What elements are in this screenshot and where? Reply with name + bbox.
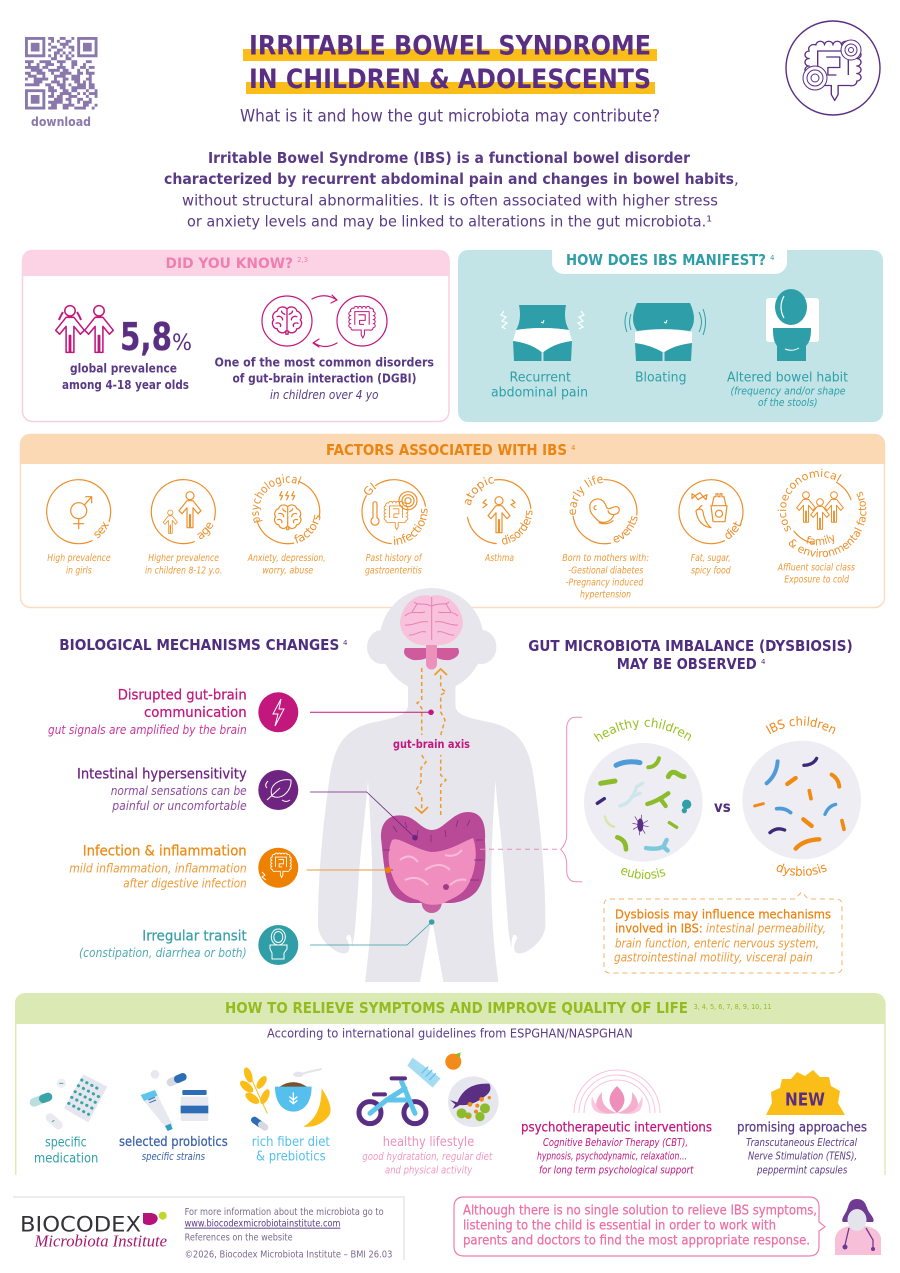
QR download label: download — [31, 115, 91, 129]
intro paragraph: or anxiety levels and may be linked to alterations in the gut microbiota.¹ — [187, 212, 712, 230]
statistic caption: global prevalence — [70, 360, 177, 376]
bracket to intestine — [480, 717, 582, 882]
mechanism: infection and inflammation: Infection & inflammation — [83, 844, 247, 860]
factor captions: Anxiety, depression, — [247, 553, 326, 564]
factor: atopic disorders — [464, 477, 532, 544]
probiotics label: selected probiotics — [119, 1135, 228, 1150]
speech bubble — [454, 1197, 825, 1256]
factor: diet: diet — [725, 521, 742, 539]
DGBI text — [214, 354, 434, 402]
manifest labels — [491, 370, 848, 409]
callout: dysbiosis mechanisms: brain function, enteric nervous system, — [615, 935, 819, 950]
dysbiosis circle — [742, 741, 861, 859]
heading: relieve: HOW TO RELIEVE SYMPTOMS AND IMPROVE QUALITY OF LIFE — [225, 999, 688, 1017]
intro paragraph — [164, 149, 739, 230]
factor captions: -Gestional diabetes — [568, 565, 643, 576]
logo: Biocodex Microbiota Institute: Microbiota Institute — [34, 1232, 167, 1251]
promising approaches label: promising approaches — [737, 1121, 867, 1136]
factor: atopic disorders: atopic — [464, 477, 494, 506]
mechanism: irregular transit: (constipation, diarrhea or both) — [79, 946, 247, 960]
references: 2,3 — [297, 256, 308, 264]
eubiosis labels: eubiosis — [621, 868, 666, 880]
factor: diet — [678, 479, 744, 544]
manifest labels: Altered bowel habit — [727, 370, 848, 386]
mechanism: intestinal hypersensitivity: normal sensations can be — [111, 784, 247, 798]
factor captions: in girls — [66, 565, 92, 576]
mechanism: irregular transit: Irregular transit — [142, 929, 247, 945]
subtitle: What is it and how the gut microbiota may contribute? — [240, 106, 660, 126]
promising approaches label: Transcutaneous Electrical — [746, 1137, 857, 1149]
callout: dysbiosis mechanisms: Dysbiosis may influence mechanisms — [615, 906, 831, 921]
intro paragraph: characterized by recurrent abdominal pain and changes in bowel habits — [164, 170, 734, 188]
factor: socioeconomical family and environmental — [778, 468, 866, 558]
promising approaches label: peppermint capsules — [756, 1164, 848, 1176]
factor: GI infections: infections — [394, 508, 428, 545]
factor: sex — [46, 479, 112, 544]
medication label: specific — [45, 1136, 87, 1151]
footer information: For more information about the microbiota go to — [185, 1207, 384, 1218]
factor: psychological factors: psychological — [252, 474, 302, 523]
guidelines note: According to international guidelines from ESPGHAN/NASPGHAN — [267, 1027, 633, 1041]
panel: how to relieve symptoms — [15, 993, 885, 1176]
factor captions: Past history of — [366, 553, 423, 564]
intro paragraph: without structural abnormalities. It is often associated with higher stress — [182, 192, 718, 210]
factor captions: gastroenteritis — [365, 565, 422, 576]
factor: GI infections: GI — [364, 482, 376, 495]
icon: toilet — [766, 289, 819, 361]
mechanism: intestinal hypersensitivity: painful or uncomfortable — [111, 799, 247, 813]
dysbiosis labels — [766, 716, 836, 876]
mechanism: intestinal hypersensitivity — [77, 766, 418, 840]
icon: bloating — [625, 303, 706, 361]
mechanism: intestinal hypersensitivity: Intestinal hypersensitivity — [77, 766, 247, 782]
psychotherapy label: psychotherapeutic interventions — [521, 1121, 712, 1136]
reference: 4 — [571, 444, 576, 452]
statistic caption — [62, 360, 189, 392]
factor captions: spicy food — [691, 565, 731, 576]
icon: healthy lifestyle — [359, 1052, 499, 1127]
manifest labels: of the stools) — [758, 397, 818, 409]
factor captions: hypertension — [580, 590, 631, 601]
statistic 5,8%: 5,8 — [120, 315, 172, 359]
callout: dysbiosis mechanisms: gastrointestinal motility, visceral pain — [614, 950, 813, 965]
psychotherapy label: for long term psychological support — [539, 1164, 694, 1176]
probiotics label — [119, 1135, 228, 1163]
factor: atopic disorders: disorders — [502, 510, 532, 544]
fiber label: & prebiotics — [256, 1150, 326, 1165]
panel: did you know — [22, 250, 449, 422]
factor: early life events: early life — [570, 475, 603, 515]
mechanism: disrupted gut-brain communication: Disrupted gut-brain — [118, 687, 247, 703]
DGBI text: One of the most common disorders — [214, 354, 434, 370]
dysbiosis labels: IBS children — [766, 716, 836, 734]
icon: fiber diet — [238, 1066, 331, 1127]
icon: abdominal pain — [501, 305, 584, 361]
factor captions — [47, 553, 855, 601]
QR code — [25, 37, 98, 110]
heading: did you know: DID YOU KNOW? — [166, 256, 293, 272]
factor: psychological factors — [252, 474, 320, 544]
icon: inflamed gut in circle — [786, 21, 880, 115]
callout: dysbiosis mechanisms: intestinal permeability, — [706, 921, 826, 936]
manifest labels: Bloating — [635, 370, 686, 386]
medication label: medication — [34, 1152, 98, 1167]
mechanism: infection and inflammation — [69, 844, 391, 891]
intro paragraph: Irritable Bowel Syndrome (IBS) is a functional bowel disorder — [208, 149, 691, 167]
eubiosis labels — [594, 718, 691, 880]
factor captions: worry, abuse — [262, 565, 313, 576]
icon: lotus — [574, 1070, 660, 1114]
body silhouette — [318, 588, 545, 982]
factor: GI infections — [361, 479, 428, 545]
fiber label: rich fiber diet — [252, 1135, 330, 1150]
logo: Biocodex Microbiota Institute — [20, 1212, 167, 1251]
lifestyle label: healthy lifestyle — [383, 1135, 474, 1150]
statistic 5,8%: % — [172, 331, 192, 356]
factor captions: Higher prevalence — [148, 553, 219, 564]
speech bubble: Although there is no single solution to relieve IBS symptoms, — [463, 1203, 817, 1218]
factor captions: Affluent social class — [777, 563, 855, 574]
callout: dysbiosis mechanisms: involved in IBS: — [615, 921, 703, 936]
mechanism: irregular transit — [79, 919, 435, 965]
footer information: ©2026, Biocodex Microbiota Institute – BMI 26.03 — [185, 1250, 392, 1261]
mechanism: disrupted gut-brain communication: gut signals are amplified by the brain — [48, 723, 247, 737]
mechanism: disrupted gut-brain communication — [48, 687, 434, 737]
logo: Biocodex Microbiota Institute: BIOCODEX — [20, 1213, 141, 1237]
heading: biological mechanisms: 4 — [343, 639, 348, 647]
intestine illustration — [381, 812, 485, 913]
lifestyle label: and physical activity — [385, 1164, 473, 1176]
icon: two children — [56, 306, 113, 352]
factor captions: Exposure to cold — [784, 575, 850, 586]
title: IRRITABLE BOWEL SYNDROME — [249, 30, 651, 62]
probiotics label: specific strains — [142, 1151, 205, 1163]
factor captions: High prevalence — [47, 553, 111, 564]
mechanism: infection and inflammation: mild inflammation, inflammation — [69, 861, 247, 875]
icon: doctor — [835, 1199, 881, 1255]
factor captions: Born to mothers with: — [562, 553, 649, 564]
psychotherapy label: Cognitive Behavior Therapy (CBT), — [543, 1137, 688, 1149]
factor: age: age — [197, 522, 214, 540]
mechanism: infection and inflammation: after digestive infection — [123, 877, 247, 891]
lifestyle label — [362, 1135, 493, 1176]
footer frame — [13, 1197, 404, 1260]
heading: dysbiosis — [528, 637, 853, 673]
factor captions: in children 8-12 y.o. — [145, 565, 222, 576]
footer information: References on the website — [185, 1233, 293, 1244]
heading: dysbiosis: MAY BE OBSERVED — [617, 655, 757, 673]
heading: biological mechanisms: BIOLOGICAL MECHANISMS CHANGES — [59, 636, 339, 654]
title: IN CHILDREN & ADOLESCENTS — [249, 64, 651, 95]
footer information: www.biocodexmicrobiotainstitute.com — [185, 1219, 340, 1230]
reference: 4 — [770, 254, 775, 262]
factor: age — [150, 479, 216, 544]
factor: psychological factors: factors — [294, 514, 320, 544]
DGBI text: in children over 4 yo — [270, 388, 378, 402]
icon: new badge: NEW — [785, 1090, 825, 1111]
icon: probiotics — [141, 1070, 208, 1131]
icon: new badge — [766, 1070, 845, 1115]
callout: dysbiosis mechanisms — [604, 892, 842, 973]
speech bubble: parents and doctors to find the most appropriate response. — [463, 1233, 810, 1248]
promising approaches label: Nerve Stimulation (TENS), — [748, 1150, 857, 1162]
mechanism: disrupted gut-brain communication: communication — [144, 705, 247, 721]
factor: socioeconomical family and environmental: socioeconomical — [778, 468, 842, 532]
promising approaches label — [737, 1121, 867, 1176]
factor captions: -Pregnancy induced — [566, 578, 644, 589]
DGBI text: of gut-brain interaction (DGBI) — [232, 370, 416, 386]
heading: manifest: HOW DOES IBS MANIFEST? — [566, 251, 766, 269]
icon: medication — [34, 1074, 107, 1125]
heading: factors: FACTORS ASSOCIATED WITH IBS — [326, 441, 567, 459]
lifestyle label: good hydratation, regular diet — [362, 1151, 493, 1163]
psychotherapy label — [521, 1121, 712, 1176]
factor: early life events: events — [614, 516, 638, 542]
manifest labels: Recurrent — [510, 370, 571, 386]
brain illustration — [400, 595, 463, 670]
medication label — [34, 1136, 98, 1167]
references: 3, 4, 5, 6, 7, 8, 9, 10, 11 — [694, 1003, 772, 1011]
factor captions: Fat, sugar, — [691, 553, 731, 564]
factor: sex: sex — [94, 522, 110, 538]
intro paragraph: , — [734, 170, 739, 188]
heading: dysbiosis: 4 — [761, 658, 766, 666]
gut-brain axis label: gut-brain axis — [393, 737, 470, 751]
statistic caption: among 4-18 year olds — [62, 377, 189, 392]
factor captions: Asthma — [484, 553, 514, 564]
footer information — [185, 1207, 392, 1261]
manifest labels: abdominal pain — [491, 384, 588, 400]
factor: early life events — [570, 475, 638, 544]
manifest labels: (frequency and/or shape — [730, 386, 846, 398]
panel: how does IBS manifest — [458, 250, 883, 422]
factor: socioeconomical family and environmental: & environmental factors — [788, 492, 866, 558]
icon: brain-gut loop — [262, 295, 387, 347]
eubiosis circle — [584, 743, 703, 862]
fiber label — [252, 1135, 330, 1165]
heading: dysbiosis: GUT MICROBIOTA IMBALANCE (DYSBIOSIS) — [528, 637, 853, 655]
gut-brain axis arrows — [415, 668, 447, 815]
eubiosis labels: healthy children — [594, 718, 691, 742]
panel: factors associated with IBS — [20, 434, 886, 608]
speech bubble: listening to the child is essential in order to work with — [463, 1218, 776, 1233]
title — [243, 30, 657, 95]
dysbiosis labels: dysbiosis — [776, 864, 827, 876]
vs: vs — [714, 798, 731, 816]
factor: socioeconomical family and environmental: family — [806, 534, 834, 546]
psychotherapy label: hypnosis, psychodynamic, relaxation… — [537, 1150, 687, 1162]
